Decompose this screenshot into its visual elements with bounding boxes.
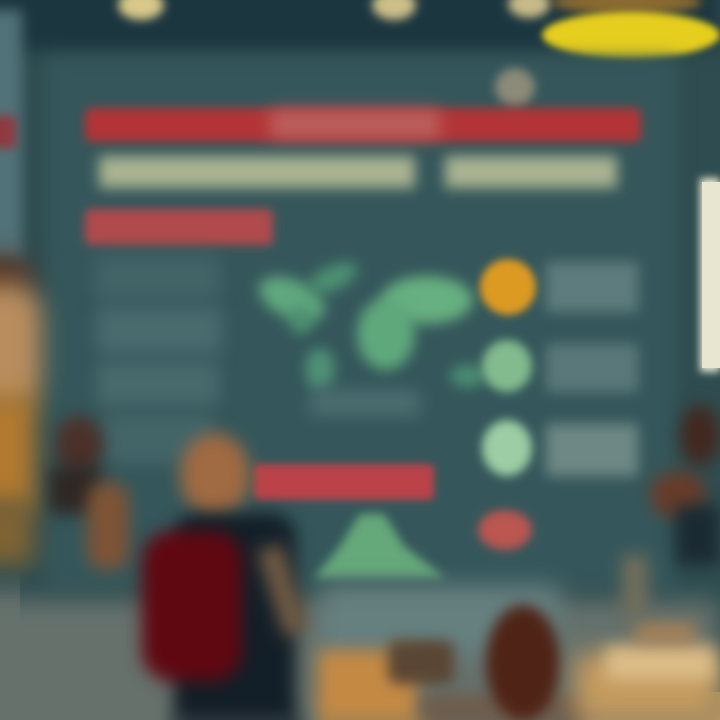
section heading: red label centre — [254, 464, 434, 500]
seated person: shoulders — [420, 695, 590, 720]
yellow pendant lamp — [537, 0, 720, 62]
chart: green mountain — [312, 508, 446, 584]
icon: green circle 2 — [482, 340, 532, 392]
text block: row 2 — [546, 344, 638, 392]
left wall strip — [0, 10, 22, 260]
text block: row 3 — [546, 424, 638, 476]
table: dark object — [388, 640, 454, 684]
icon: orange circle — [480, 259, 536, 315]
ceiling band — [0, 0, 720, 50]
title: pale heading — [90, 147, 626, 198]
icon: green circle 3 — [482, 420, 532, 476]
lower board text — [320, 585, 560, 655]
left person: foreground — [0, 240, 60, 578]
table: right papers — [558, 614, 720, 720]
person: raised arm — [257, 543, 309, 637]
icon: red circle — [478, 510, 532, 550]
world map — [252, 256, 486, 393]
title: red banner — [78, 98, 648, 152]
seated person: head — [486, 605, 560, 720]
ceiling light: left — [118, 0, 164, 20]
board panel — [46, 58, 676, 588]
map caption — [310, 390, 420, 416]
ceiling light: right — [508, 0, 550, 18]
central person — [130, 422, 314, 720]
right window — [700, 178, 720, 372]
floor — [0, 600, 720, 720]
top-centre speaker dot — [495, 68, 535, 106]
table: left orange — [318, 650, 418, 720]
left person: background — [40, 409, 139, 578]
right faint person arm — [622, 555, 648, 615]
left text column — [96, 259, 224, 462]
right person — [644, 399, 720, 572]
person: torso — [174, 513, 296, 720]
person: red backpack — [142, 531, 242, 681]
seated person — [411, 596, 584, 720]
left wall red accent — [0, 116, 16, 148]
text block: row 1 — [546, 262, 638, 312]
person: head — [180, 433, 250, 517]
ceiling light: centre — [372, 0, 416, 20]
section heading: red label left — [85, 209, 273, 245]
